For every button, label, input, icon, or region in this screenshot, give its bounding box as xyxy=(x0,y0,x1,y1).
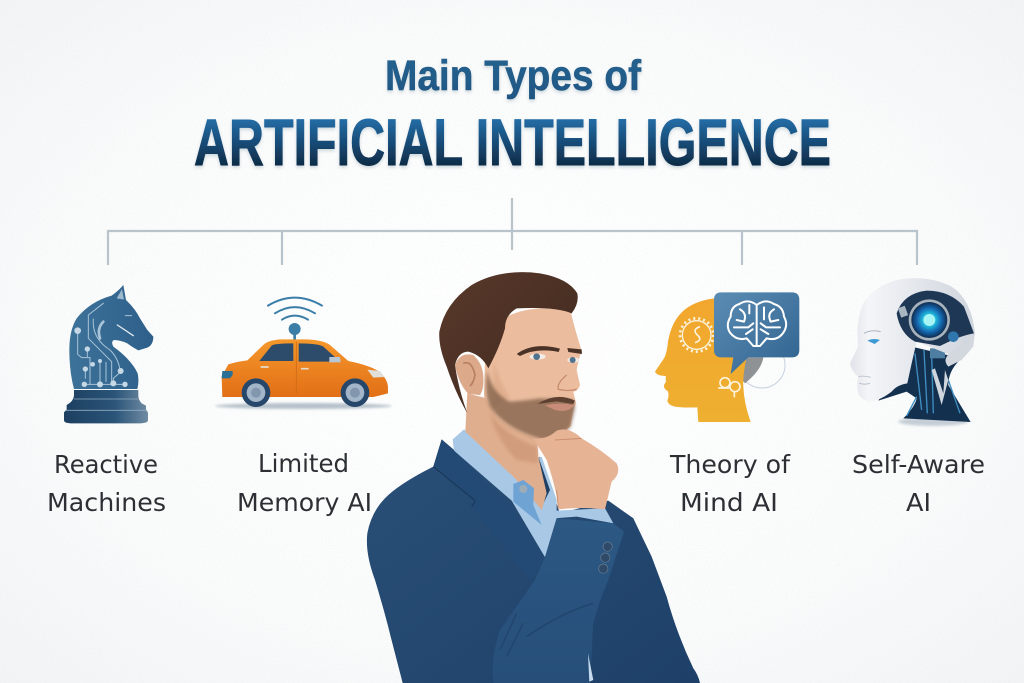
yellow head silhouette xyxy=(655,298,751,422)
shirt placket peek xyxy=(588,653,593,682)
gray head back xyxy=(739,357,763,383)
label: Limited Memory AI xyxy=(237,449,372,517)
circuit traces xyxy=(78,303,133,384)
label: Reactive Machines: Machines xyxy=(47,488,166,517)
label: Limited Memory AI: Limited xyxy=(258,449,349,478)
hair xyxy=(439,272,578,413)
gear symbol xyxy=(680,318,713,352)
connector tree xyxy=(108,198,917,265)
robot mechanical side xyxy=(897,291,974,346)
eyes and brows xyxy=(517,346,582,363)
wifi arcs xyxy=(268,298,322,320)
car windows xyxy=(259,343,293,361)
knight base xyxy=(64,390,148,423)
robot neck circuitry xyxy=(878,347,971,422)
neck shadow xyxy=(490,413,538,463)
sleeve folds xyxy=(500,603,593,657)
icon: self-aware robot head xyxy=(850,278,975,426)
small bulb symbols xyxy=(718,378,740,397)
car body xyxy=(222,339,388,397)
mustache and lips xyxy=(537,397,575,404)
circle outline xyxy=(739,342,785,388)
label: Self-Aware AI xyxy=(852,450,985,517)
lapel xyxy=(433,439,545,582)
shirt collar right xyxy=(513,480,542,525)
wheels xyxy=(242,378,369,407)
antenna xyxy=(289,323,301,340)
head and face xyxy=(484,308,582,445)
robot eye xyxy=(867,339,880,344)
jacket xyxy=(367,439,700,683)
robot plates xyxy=(946,335,974,367)
title xyxy=(194,52,831,179)
robot lens xyxy=(909,299,950,341)
man in blue blazer xyxy=(367,272,700,683)
label: Theory of Mind AI: Mind AI xyxy=(680,488,778,517)
speech bubble xyxy=(714,292,799,374)
label: Self-Aware AI: Self-Aware xyxy=(852,450,985,479)
title line 1: Main Types of xyxy=(385,52,642,100)
label: Reactive Machines: Reactive xyxy=(54,450,158,479)
robot base shadow xyxy=(898,417,968,426)
nose shadow xyxy=(558,375,577,390)
label: Reactive Machines xyxy=(47,450,166,517)
beard xyxy=(486,370,575,443)
label: Limited Memory AI: Memory AI xyxy=(237,488,372,517)
icon: connected car xyxy=(215,298,392,409)
robot white head xyxy=(850,278,975,402)
hand on chin xyxy=(533,429,618,509)
brain outline xyxy=(728,301,786,346)
neck xyxy=(465,393,547,510)
blazer sleeve xyxy=(492,518,624,683)
label: Theory of Mind AI xyxy=(669,450,791,517)
icon: theory of mind head xyxy=(655,292,799,422)
car shadow xyxy=(215,403,392,409)
icon: chess knight xyxy=(64,285,153,423)
ear xyxy=(455,354,483,395)
label: Theory of Mind AI: Theory of xyxy=(669,450,791,479)
sleeve buttons xyxy=(599,542,612,573)
inner jacket shadow xyxy=(538,457,550,505)
shirt xyxy=(453,429,557,557)
knight ear inner xyxy=(117,289,124,300)
label: Self-Aware AI: AI xyxy=(906,488,931,517)
knight head and body xyxy=(69,285,153,389)
lights and handles xyxy=(222,371,233,378)
sleeve cuff xyxy=(555,508,613,523)
face shading xyxy=(493,360,510,407)
